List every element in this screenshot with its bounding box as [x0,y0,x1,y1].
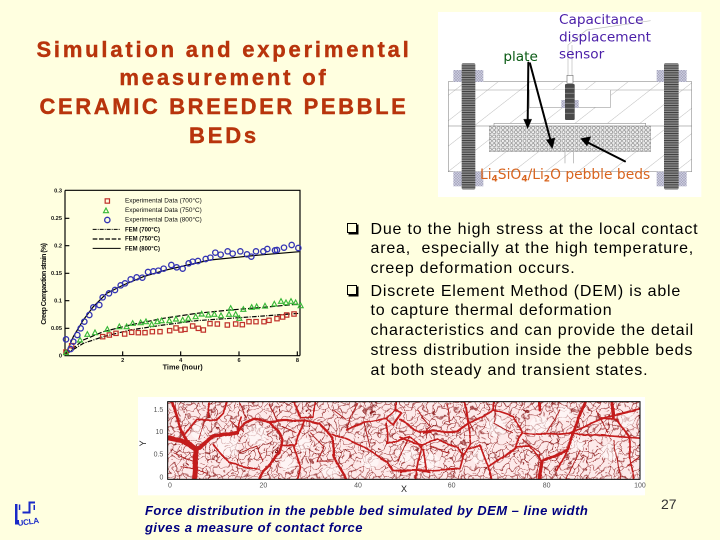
panel background [438,12,701,197]
caption: Force distribution in the pebble bed simulated by DEM – line width [145,502,588,518]
title [36,36,412,148]
axis tick labels: 8 [296,358,299,364]
bullet text: DEM [347,282,694,379]
bullet text: DEM: Discrete Element Method (DEM) is able [370,282,681,300]
axis tick labels: 2 [121,358,124,364]
axis labels: 0 [168,483,172,490]
pebble bed [489,126,651,152]
axis tick labels: 6 [238,358,241,364]
axis labels: 10 [156,429,163,436]
legend: Experimental Data (750°C) [125,206,202,214]
legend [93,197,202,252]
icon: UCLA logo [15,502,40,528]
experimental data 800C [63,242,301,352]
bullet text: creep: Due to the high stress at the local contact [370,220,698,238]
axis tick labels: 0.3 [54,188,62,194]
displacement sensor [561,21,651,120]
label: pebble beds: 4 [492,175,498,185]
axis labels: Y [138,440,148,446]
bolts and nuts [453,63,687,189]
axes [65,190,300,356]
axis labels [138,407,646,494]
axis labels: 80 [543,483,551,490]
bullet text: DEM: characteristics and can provide the detail [370,322,694,339]
arrows [524,63,625,161]
label: pebble beds: /Li [528,167,544,183]
axis tick labels: 0 [59,354,62,360]
axis labels: 40 [354,483,362,490]
axis labels: 1.5 [154,407,163,414]
label: capacitance sensor: Capacitance [559,12,644,28]
bullet text: creep: creep deformation occurs. [370,260,575,277]
axis tick labels: 0.05 [51,326,62,332]
plot frame [168,402,640,479]
experimental data 700C [64,312,296,354]
label: plate: plate [503,49,538,65]
apparatus body [448,82,692,172]
legend: FEM (800°C) [125,246,160,252]
bullet text: DEM: to capture thermal deformation [370,302,612,319]
axis titles [41,243,203,372]
bullet text: DEM: at both steady and transient states. [370,362,648,379]
axis tick labels: 0.15 [51,271,62,277]
axis titles: Creep Compaction strain (%) [41,243,48,325]
fine contact network [168,402,640,479]
label: pebble beds: Li [480,167,492,183]
force network figure [138,392,650,495]
strong force chains [165,400,642,482]
title: BEDs [189,123,259,148]
title: measurement of [119,65,329,90]
label: pebble beds: O pebble beds [550,167,650,183]
label: pebble beds: 4 [521,175,528,185]
title: Simulation and experimental [36,36,412,62]
title: CERAMIC BREEDER PEBBLE [40,94,408,119]
axis labels: 0 [159,474,163,481]
axis labels: 100 [634,483,646,490]
bullet text: creep: area, especially at the high temperature, [370,240,694,257]
figure background [138,397,645,495]
legend: FEM (750°C) [125,237,160,243]
axis labels: X [401,484,407,494]
legend: Experimental Data (700°C) [125,197,202,205]
label: capacitance sensor: displacement [559,29,652,45]
medium force chains [173,403,640,479]
axis tick labels: 4 [179,358,183,364]
axis titles: Time (hour) [163,363,203,372]
legend: Experimental Data (800°C) [125,216,202,224]
axis labels: 20 [259,483,267,490]
axis tick labels [51,188,299,364]
icon: UCLA logo: UCLA [17,516,40,528]
axis tick labels: 0.25 [51,216,62,222]
caption: gives a measure of contact force [145,520,363,535]
axis labels: 0.5 [154,452,163,459]
axis tick labels: 0.1 [54,298,62,304]
label: capacitance sensor: sensor [559,47,605,63]
legend: FEM (700°C) [125,227,160,233]
experimental data 750C [63,299,303,355]
caption [145,502,588,535]
page number: 27 [661,496,677,512]
axis labels: 60 [448,483,456,490]
plot clip wrapper [168,402,640,479]
pale pebble bubbles [191,407,635,478]
bullet text: DEM: stress distribution inside the pebble beds [370,342,693,359]
chart: creep compaction strain vs time [41,188,303,372]
label: pebble beds: SiO [498,167,521,183]
label: pebble beds: 2 [544,175,550,185]
FEM curves [66,252,299,354]
bullet text: creep [347,220,698,277]
axis tick labels: 0.2 [54,243,62,249]
